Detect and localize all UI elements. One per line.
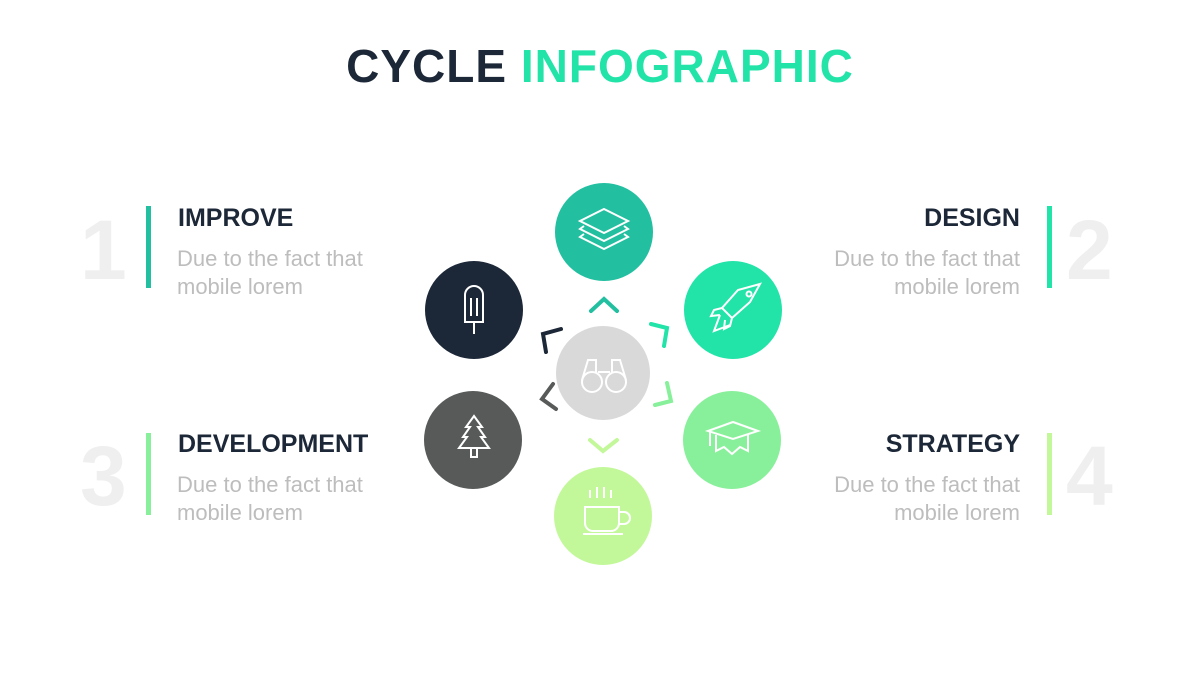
heading: IMPROVE bbox=[178, 204, 293, 232]
bar bbox=[1047, 206, 1052, 288]
heading: STRATEGY bbox=[886, 430, 1020, 458]
circle: graduation bbox=[683, 391, 781, 489]
body: Due to the fact that mobile lorem bbox=[177, 472, 363, 525]
heading: DEVELOPMENT bbox=[178, 430, 368, 458]
body: Due to the fact that mobile lorem bbox=[834, 472, 1020, 525]
number 2: 2 bbox=[1066, 203, 1113, 297]
circle: popsicle bbox=[425, 261, 523, 359]
bar bbox=[146, 206, 151, 288]
title: CYCLE INFOGRAPHIC bbox=[346, 40, 854, 92]
item 1: improve bbox=[80, 203, 363, 299]
bar bbox=[1047, 433, 1052, 515]
number 1: 1 bbox=[80, 203, 127, 297]
item 2: design bbox=[834, 203, 1113, 299]
bar bbox=[146, 433, 151, 515]
item 3: development bbox=[80, 429, 368, 525]
heading: DESIGN bbox=[924, 204, 1020, 232]
circle: rocket bbox=[684, 261, 782, 359]
center circle: binoculars bbox=[556, 326, 650, 420]
circle: coffee bbox=[554, 467, 652, 565]
circle: tree bbox=[424, 391, 522, 489]
circle: layers bbox=[555, 183, 653, 281]
arrows bbox=[542, 299, 671, 451]
number 4: 4 bbox=[1066, 429, 1113, 523]
body: Due to the fact that mobile lorem bbox=[834, 246, 1020, 299]
body: Due to the fact that mobile lorem bbox=[177, 246, 363, 299]
item 4: strategy bbox=[834, 429, 1113, 525]
number 3: 3 bbox=[80, 429, 127, 523]
